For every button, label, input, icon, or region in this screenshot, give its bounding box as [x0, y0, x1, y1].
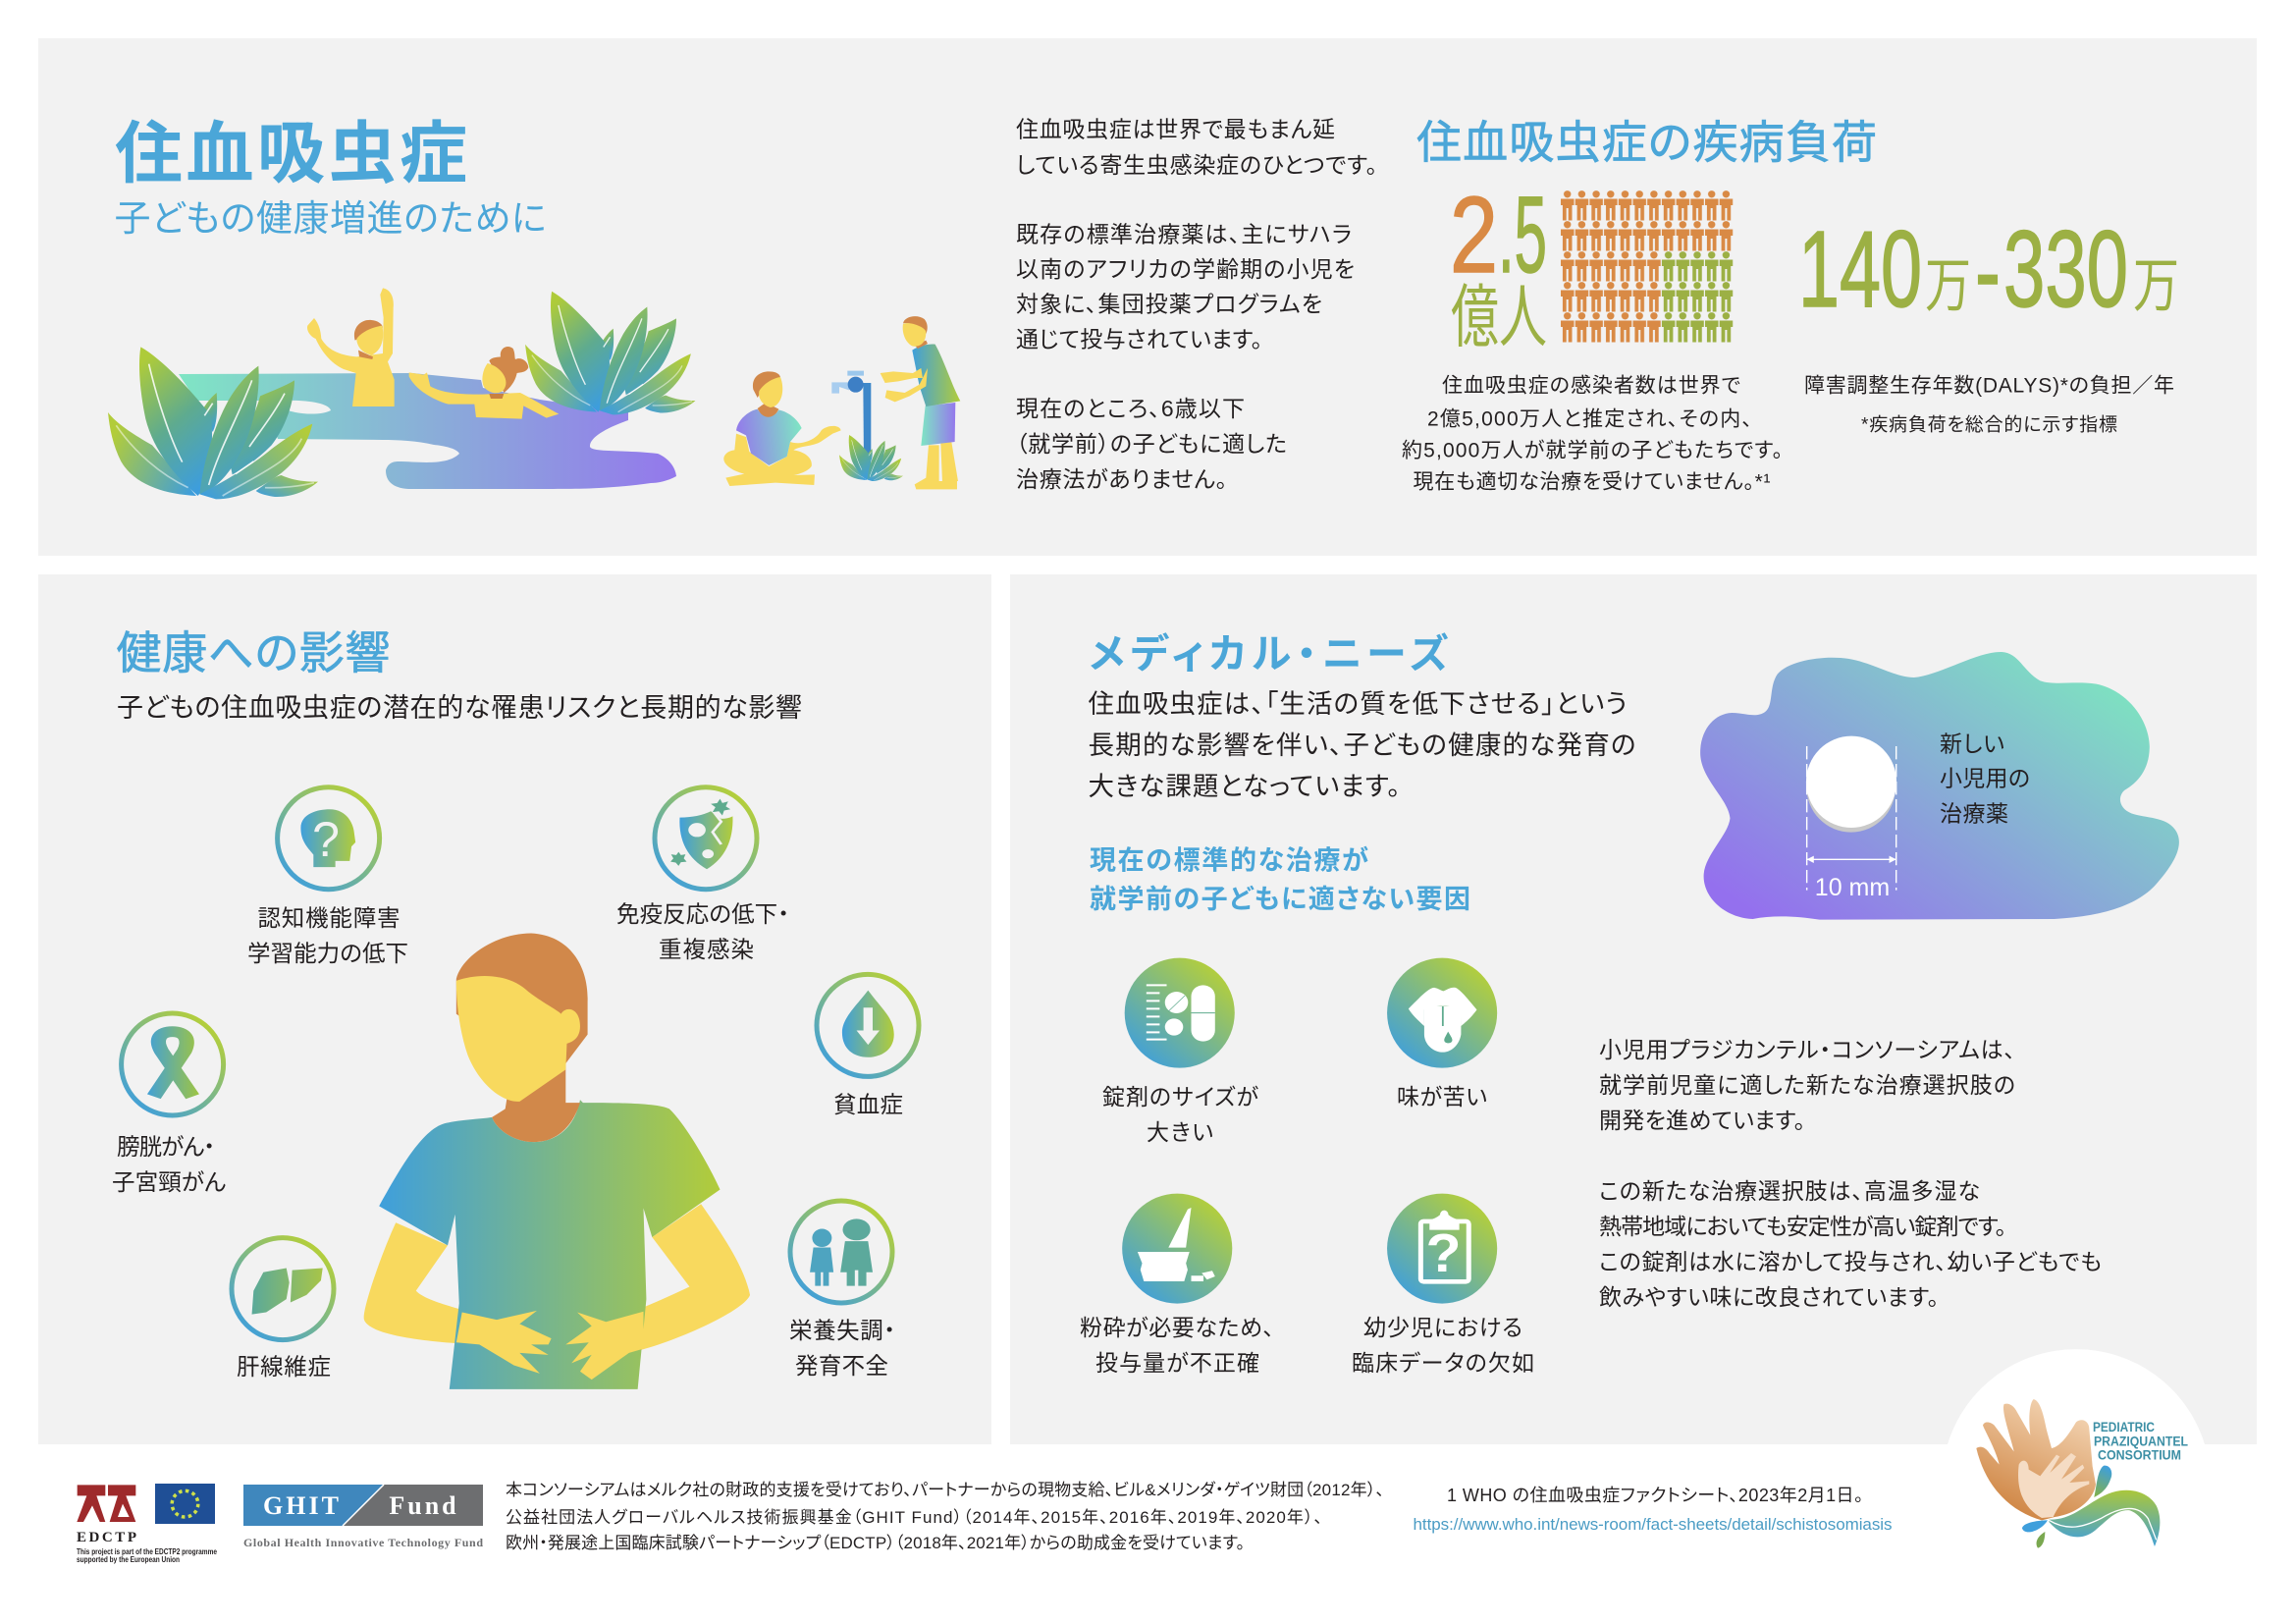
text: medical needs — [1088, 689, 1635, 801]
text: consortium: 小児用プラジカンテル・コンソーシアムは、 — [1599, 1037, 2015, 1062]
icon: liver — [232, 1238, 334, 1340]
blob: new paediatric tablet — [1700, 652, 2179, 920]
label: crushing needed: 粉砕が必要なため、 — [1080, 1315, 1274, 1340]
icon: anaemia — [817, 974, 919, 1076]
label: liver fibrosis: 肝線維症 — [237, 1354, 331, 1380]
intro text — [1016, 116, 1377, 492]
icon: bitter taste — [1387, 958, 1497, 1068]
statistic: DALYs: - — [1975, 211, 2001, 332]
text: medical needs: 長期的な影響を伴い、子どもの健康的な発育の — [1088, 731, 1635, 760]
label: tablet size: 大きい — [1147, 1119, 1213, 1145]
statistic: DALYs: 万 — [1925, 253, 1971, 319]
logo: GHIT Fund: Fund — [389, 1491, 459, 1520]
statistic: 2.5 billion people — [1450, 175, 1547, 355]
panel: medical needs — [1010, 574, 2257, 1444]
label: lack of clinical data: 臨床データの欠如 — [1352, 1350, 1534, 1376]
statistic: DALYs: 万 — [2133, 253, 2179, 319]
icon: cognitive impairment — [278, 787, 380, 890]
icon: mortar and pestle — [1122, 1194, 1232, 1304]
intro text: 対象に、集団投薬プログラムを — [1016, 291, 1322, 316]
panel: health effects — [38, 574, 991, 1444]
logo: GHIT Fund: GHIT — [263, 1491, 342, 1520]
logo: Pediatric Praziquantel Consortium: CONSORTIUM — [2098, 1448, 2181, 1463]
children at water tap — [723, 316, 960, 489]
intro text: している寄生虫感染症のひとつです。 — [1016, 152, 1377, 178]
intro text: 住血吸虫症は世界で最もまん延 — [1016, 116, 1335, 141]
sitting child — [723, 371, 841, 486]
label: new paediatric medicine — [1940, 731, 2030, 827]
icon: immune response — [655, 787, 757, 890]
plant: large left — [108, 347, 318, 499]
label: 10 mm: 10 mm — [1815, 874, 1890, 901]
logo: GHIT Fund — [243, 1485, 483, 1549]
logo: EDCTP: This project is part of the EDCTP2 programme — [77, 1547, 217, 1556]
icon: clipboard question: ? — [1426, 1223, 1462, 1284]
text: funding — [506, 1481, 1384, 1552]
heading: medical needs: メディカル・ニーズ — [1090, 631, 1449, 677]
footnote: 1 WHO の住血吸虫症ファクトシート、2023年2月1日。 — [1447, 1486, 1863, 1505]
subtitle: 子どもの健康増進のために — [114, 198, 546, 239]
label: lack of clinical data — [1352, 1315, 1534, 1376]
logo: EDCTP: EDCTP — [77, 1530, 136, 1545]
subheading: health effects: 子どもの住血吸虫症の潜在的な罹患リスクと長期的な影響 — [117, 693, 802, 723]
text: consortium: 熱帯地域においても安定性が高い錠剤です。 — [1599, 1214, 2006, 1239]
intro text: 治療法がありません。 — [1016, 466, 1227, 492]
caption: DALYs — [1804, 375, 2174, 436]
intro text: 通じて投与されています。 — [1016, 326, 1262, 352]
heading: disease burden: 住血吸虫症の疾病負荷 — [1416, 117, 1877, 168]
tablet — [1806, 736, 1896, 891]
text: funding: 本コンソーシアムはメルク社の財政的支援を受けており、パートナーからの現物支給、ビル&メリンダ・ゲイツ財団（2012年）、 — [506, 1481, 1384, 1499]
icon: cognitive impairment: ? — [312, 812, 340, 867]
caption: infections: 現在も適切な治療を受けていません。*¹ — [1414, 471, 1771, 493]
text: consortium: この新たな治療選択肢は、高温多湿な — [1599, 1178, 1980, 1204]
label: bladder and cervical cancer: 膀胱がん・ — [117, 1134, 215, 1160]
label: immune response: 免疫反応の低下・ — [616, 901, 789, 927]
label: crushing needed: 投与量が不正確 — [1095, 1350, 1259, 1376]
panel: top introduction — [38, 38, 2257, 556]
logo: Pediatric Praziquantel Consortium — [1948, 1349, 2205, 1548]
intro text: 以南のアフリカの学齢期の小児を — [1016, 256, 1355, 282]
statistic: DALYs: 140 — [1798, 209, 1922, 330]
figure: child with stomach ache — [364, 934, 750, 1389]
statistic: 2.5 billion people: .5 — [1498, 175, 1547, 296]
label: lack of clinical data: 幼少児における — [1363, 1315, 1522, 1340]
label: new paediatric medicine: 新しい — [1940, 731, 2004, 756]
label: cognitive impairment: 認知機能障害 — [257, 905, 400, 931]
caption: DALYs: *疾病負荷を総合的に示す指標 — [1861, 414, 2117, 436]
icon: tablet size — [1125, 958, 1235, 1068]
logo: EDCTP: supported by the European Union — [77, 1555, 180, 1564]
subheading: reasons: 現在の標準的な治療が — [1090, 844, 1368, 876]
label: malnutrition — [789, 1318, 895, 1379]
label: anaemia: 貧血症 — [833, 1092, 903, 1117]
text: funding: 欧州・発展途上国臨床試験パートナーシップ（EDCTP）（2018年、2021年）からの助成金を受けています。 — [506, 1534, 1245, 1552]
caption: infections: 住血吸虫症の感染者数は世界で — [1442, 375, 1740, 397]
label: bladder and cervical cancer: 子宮頸がん — [112, 1169, 226, 1195]
illustration: pond with swimmers, plants and children at tap — [108, 288, 960, 499]
text: medical needs: 大きな課題となっています。 — [1088, 772, 1400, 801]
text: medical needs: 住血吸虫症は、「生活の質を低下させる」という — [1088, 689, 1628, 719]
title: 住血吸虫症 — [115, 116, 467, 191]
swimmer with hair bun — [409, 347, 559, 419]
label: new paediatric medicine: 治療薬 — [1940, 801, 2008, 827]
label: tablet size — [1102, 1084, 1258, 1145]
standing child — [881, 316, 960, 489]
label: tablet size: 錠剤のサイズが — [1102, 1084, 1258, 1110]
label: cognitive impairment: 学習能力の低下 — [247, 941, 408, 966]
label: new paediatric medicine: 小児用の — [1940, 766, 2030, 791]
caption: infections — [1402, 375, 1783, 493]
icon: clipboard question — [1387, 1194, 1497, 1304]
text: consortium: 就学前児童に適した新たな治療選択肢の — [1599, 1072, 2015, 1098]
text: consortium: 開発を進めています。 — [1599, 1108, 1805, 1133]
caption: infections: 約5,000万人が就学前の子どもたちです。 — [1402, 440, 1783, 461]
text: consortium: 飲みやすい味に改良されています。 — [1599, 1284, 1939, 1310]
subheading: reasons — [1090, 844, 1470, 914]
label: crushing needed — [1080, 1315, 1274, 1376]
icon: malnutrition — [790, 1201, 892, 1303]
statistic: 2.5 billion people: 億人 — [1451, 279, 1547, 355]
plant: large right — [525, 292, 695, 414]
label: bladder and cervical cancer — [112, 1134, 226, 1195]
statistic: 2.5 billion people: 2 — [1450, 175, 1498, 296]
intro text: 現在のところ、6歳以下 — [1016, 396, 1245, 421]
water tap — [831, 371, 871, 461]
text: consortium: この錠剤は水に溶かして投与され、幼い子どもでも — [1599, 1249, 2102, 1274]
logo: EDCTP — [77, 1484, 217, 1564]
label: bitter taste: 味が苦い — [1397, 1084, 1487, 1110]
label: cognitive impairment — [247, 905, 408, 966]
label: immune response — [616, 901, 789, 962]
label: immune response: 重複感染 — [659, 937, 754, 962]
intro text: 既存の標準治療薬は、主にサハラ — [1016, 222, 1352, 247]
pond — [179, 373, 676, 489]
logo: Pediatric Praziquantel Consortium: PRAZIQUANTEL — [2094, 1435, 2188, 1449]
subheading: reasons: 就学前の子どもに適さない要因 — [1090, 885, 1470, 914]
text: funding: 公益社団法人グローバルヘルス技術振興基金（GHIT Fund）（2014年、2015年、2016年、2019年、2020年）、 — [506, 1508, 1322, 1527]
logo: GHIT Fund: Global Health Innovative Technology Fund — [243, 1536, 483, 1549]
link: https://www.who.int/news-room/fact-sheets/detail/schistosomiasis — [1414, 1515, 1893, 1534]
label: malnutrition: 発育不全 — [795, 1353, 888, 1379]
pictogram: people grid — [1561, 190, 1734, 343]
heading: health effects: 健康への影響 — [116, 627, 391, 678]
statistic: DALYs: 330 — [2003, 209, 2128, 330]
icon: ribbon — [122, 1013, 224, 1115]
logo: Pediatric Praziquantel Consortium: PEDIATRIC — [2093, 1420, 2155, 1435]
label: malnutrition: 栄養失調・ — [789, 1318, 895, 1343]
caption: DALYs: 障害調整生存年数(DALYS)*の負担／年 — [1804, 375, 2174, 397]
text: consortium — [1599, 1037, 2102, 1310]
swimmer with raised arm — [307, 288, 395, 406]
intro text: （就学前）の子どもに適した — [1016, 431, 1287, 457]
statistic: DALYs — [1798, 209, 2179, 332]
plant: small at tap — [839, 435, 903, 481]
caption: infections: 2億5,000万人と推定され、その内、 — [1427, 408, 1752, 430]
